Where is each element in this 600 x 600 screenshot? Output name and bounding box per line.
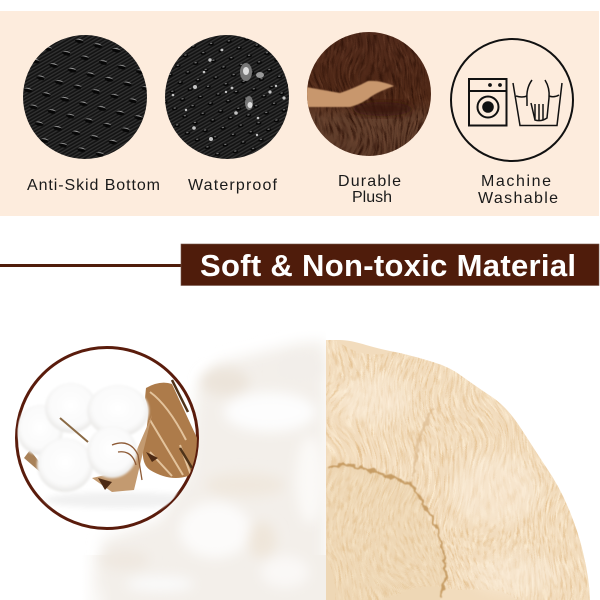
label: durable plush [338, 173, 401, 206]
icon: durable plush with hand [306, 32, 431, 156]
label: durable plush: Plush [352, 189, 392, 206]
icon: waterproof fabric with droplets [165, 35, 289, 159]
label: machine washable: Washable [478, 190, 558, 207]
highlights [337, 376, 560, 595]
cushion seam [329, 408, 446, 597]
heading: soft and non-toxic material: Soft & Non-toxic Material [200, 248, 576, 283]
panel: beige plush bed (right half) [326, 340, 596, 600]
cotton shadow [45, 492, 195, 508]
cotton bolls [17, 383, 149, 492]
label: machine washable [478, 173, 558, 207]
fur streak layers [326, 340, 596, 600]
panel: features band [0, 11, 599, 216]
panel: raw cotton texture (left half) [82, 342, 326, 600]
label: waterproof: Waterproof [188, 177, 278, 194]
washing machine [469, 79, 506, 126]
label: machine washable: Machine [481, 173, 551, 190]
label: durable plush: Durable [338, 173, 401, 190]
bract [92, 415, 152, 492]
icon: machine washable [451, 39, 573, 161]
hand [306, 81, 394, 107]
heading connector line [0, 264, 181, 267]
seed pod [143, 383, 198, 478]
icon: anti-skid bottom fabric [23, 35, 147, 159]
label: anti-skid bottom: Anti-Skid Bottom [27, 177, 160, 194]
cushion shade [326, 466, 448, 600]
callout: cotton boll photo [16, 348, 198, 528]
hand wash basin [513, 80, 562, 126]
